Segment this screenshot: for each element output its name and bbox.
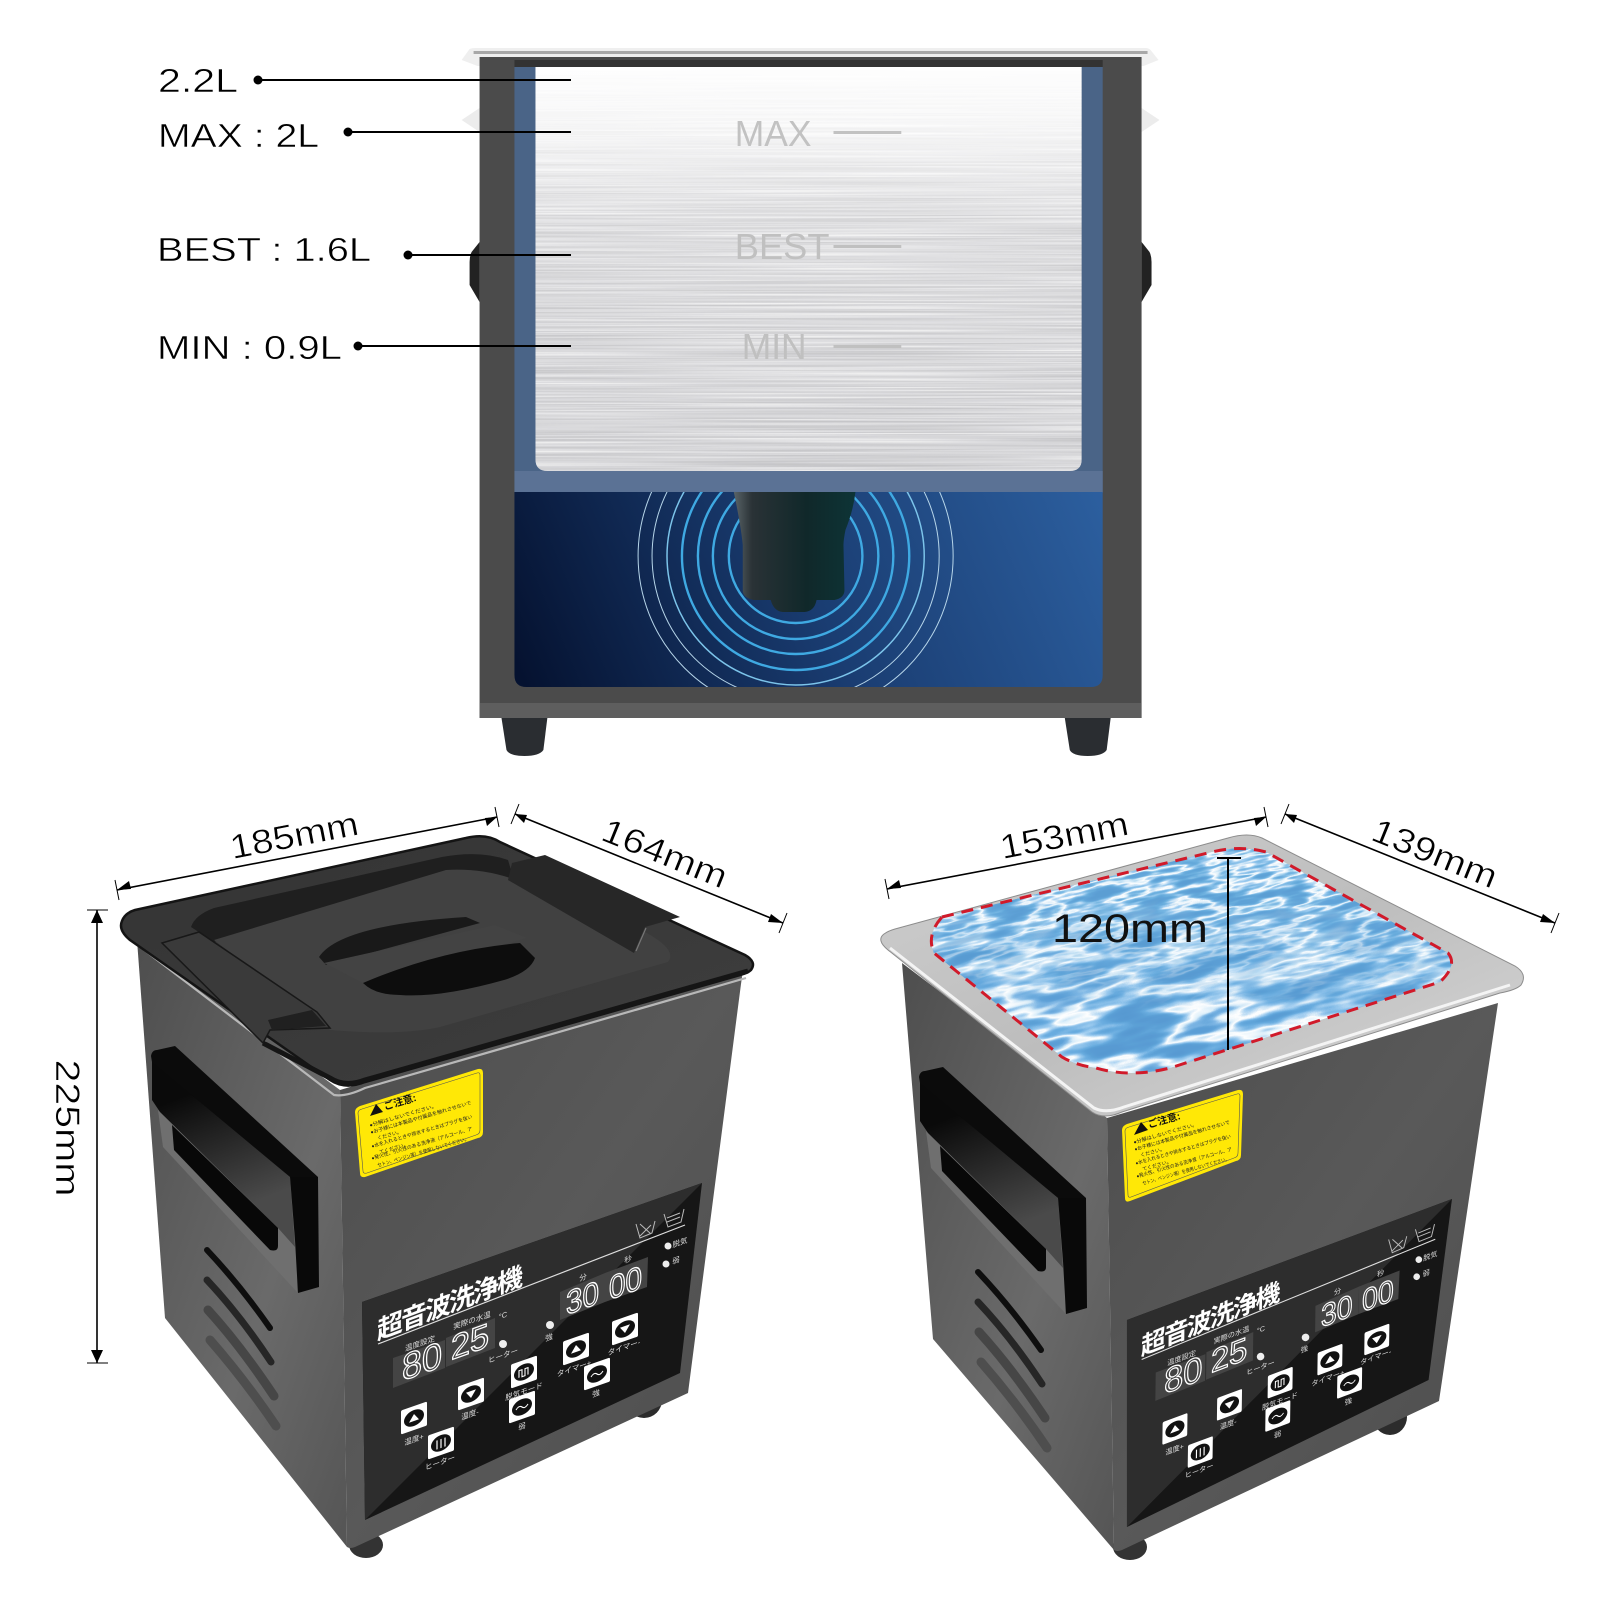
panel upper shade xyxy=(1124,1199,1452,1527)
display 30: 30 xyxy=(1321,1288,1353,1334)
scale mark MIN xyxy=(742,326,901,367)
steel inner tank xyxy=(535,67,1082,471)
ventilation slats xyxy=(207,1250,276,1426)
button down temp xyxy=(458,1377,484,1411)
label plate xyxy=(1122,1090,1243,1202)
left side face xyxy=(137,940,347,1547)
panel small labels: 分 xyxy=(1334,1286,1342,1297)
panel rule xyxy=(1142,1239,1435,1359)
panel small labels: 脱気モード xyxy=(1262,1390,1298,1412)
side tab right xyxy=(1142,108,1160,132)
side tab left xyxy=(462,108,480,132)
label text: セトン、ベンジン等）を使用しないでください。 xyxy=(1142,1155,1230,1187)
warning label xyxy=(355,1069,483,1177)
left tab xyxy=(162,932,330,1043)
button timer down xyxy=(612,1312,638,1346)
panel small labels: 脱気 xyxy=(1423,1249,1438,1263)
tank body xyxy=(480,57,1142,718)
scale mark MAX xyxy=(735,113,901,154)
panel small labels: タイマー- xyxy=(1360,1347,1392,1367)
product: open unit with water xyxy=(880,834,1524,1560)
display 00: 00 xyxy=(1362,1272,1394,1319)
panel diagonal xyxy=(1124,1199,1452,1527)
recess dark wall xyxy=(191,854,514,942)
scale mark MIN: MIN xyxy=(742,326,807,367)
foot right xyxy=(1065,718,1111,756)
panel small labels: ヒーター xyxy=(1185,1461,1213,1480)
panel small labels: 温度+ xyxy=(1165,1442,1184,1457)
callout 2.2L xyxy=(158,62,571,99)
depth label: 120mm xyxy=(1052,907,1208,951)
control panel xyxy=(1124,1199,1452,1527)
rim top line xyxy=(474,51,1148,54)
side handle left xyxy=(470,242,480,302)
callout MAX 2L xyxy=(158,117,571,154)
panel upper shade xyxy=(362,1183,702,1520)
base band xyxy=(480,703,1142,718)
rim highlight xyxy=(890,948,1510,1111)
scale mark MAX: MAX xyxy=(735,113,812,154)
display 25: 25 xyxy=(451,1316,489,1368)
dimension: 153mm: 153mm xyxy=(997,805,1132,867)
lid carry bar xyxy=(324,925,527,983)
button timer up xyxy=(563,1332,589,1366)
warning triangle xyxy=(370,1104,383,1116)
water surface xyxy=(932,848,1452,1073)
dimension: 185mm: 185mm xyxy=(227,805,362,867)
button weak xyxy=(509,1390,535,1424)
callout MIN 0.9L: MIN : 0.9L xyxy=(157,329,342,366)
panel small labels: 実際の水温 xyxy=(453,1309,491,1332)
label text: セトン、ベンジン等）を使用しないでください。 xyxy=(377,1135,470,1169)
dimension: 164mm: 164mm xyxy=(596,812,733,896)
panel small labels: 温度設定 xyxy=(1167,1348,1197,1368)
label text: てください。 xyxy=(1142,1158,1172,1173)
panel small labels: 強 xyxy=(592,1387,600,1399)
dimension: 139mm: 139mm xyxy=(1366,812,1503,896)
ventilation slats xyxy=(978,1272,1047,1448)
lid recess floor xyxy=(214,870,670,1032)
callout MIN 0.9L xyxy=(157,329,571,366)
panel small labels: 強 xyxy=(545,1331,553,1343)
left side face xyxy=(902,963,1114,1550)
handle lower plate xyxy=(926,1131,1065,1313)
display 25: 25 xyxy=(1211,1331,1248,1381)
panel small labels: 弱 xyxy=(518,1421,526,1432)
lower band xyxy=(514,471,1103,493)
label text: ●発火性、引火性のある洗浄液（アルコール、ア xyxy=(371,1125,473,1162)
dark top edge xyxy=(514,60,1103,67)
panel small labels: ヒーター xyxy=(425,1453,455,1472)
display 30: 30 xyxy=(566,1274,599,1323)
callout BEST 1.6L xyxy=(157,231,571,268)
handle grip xyxy=(152,1057,295,1247)
foot front xyxy=(349,1532,383,1558)
handle slot xyxy=(940,1146,1046,1272)
panel small labels: 分 xyxy=(579,1272,587,1283)
foot right xyxy=(626,1382,662,1418)
front face xyxy=(340,970,743,1548)
button strong xyxy=(1337,1367,1362,1399)
right tab xyxy=(508,855,680,953)
label text: ●お子様には本製品や付属品を触れさせないで xyxy=(370,1099,472,1136)
handle grip xyxy=(920,1078,1063,1268)
panel small labels: 温度+ xyxy=(404,1431,424,1447)
panel small labels: 温度- xyxy=(461,1406,479,1422)
panel small labels xyxy=(404,1235,688,1472)
foot right xyxy=(1373,1399,1407,1435)
foot left xyxy=(501,718,547,756)
panel small labels: 弱 xyxy=(1274,1429,1281,1440)
scale mark BEST: BEST xyxy=(735,226,830,267)
button heater xyxy=(428,1426,454,1460)
wash icons xyxy=(636,1209,684,1238)
handle assembly xyxy=(151,1046,319,1293)
control panel xyxy=(362,1183,702,1520)
display 00: 00 xyxy=(609,1259,642,1308)
panel title: 超音波洗浄機 xyxy=(1141,1277,1281,1361)
button up temp xyxy=(1162,1413,1188,1445)
callout MAX 2L: MAX : 2L xyxy=(158,117,319,154)
label text: てください。 xyxy=(379,1141,409,1156)
warning label xyxy=(1122,1090,1243,1202)
label text xyxy=(369,1099,473,1169)
wash icons xyxy=(1388,1224,1435,1253)
button timer down xyxy=(1364,1323,1389,1355)
dimension: 139mm xyxy=(1281,804,1559,933)
panel small labels: 温度- xyxy=(1220,1417,1237,1432)
left tab ledge xyxy=(268,1010,326,1030)
scale mark BEST xyxy=(735,226,901,267)
panel small labels: タイマー- xyxy=(608,1337,641,1358)
foot front xyxy=(1113,1534,1147,1560)
panel small labels: 強 xyxy=(1301,1343,1309,1355)
lid hole back xyxy=(319,917,480,965)
panel diagonal xyxy=(362,1183,702,1520)
dimension: 185mm xyxy=(115,805,499,900)
ultrasonic wave rings xyxy=(638,492,954,687)
handle end xyxy=(1058,1198,1087,1314)
button down temp xyxy=(1217,1389,1242,1421)
front face xyxy=(1107,1003,1498,1551)
callout 2.2L: 2.2L xyxy=(158,62,238,99)
indicator lights xyxy=(1257,1256,1422,1360)
display 80: 80 xyxy=(402,1334,442,1390)
handle lower plate xyxy=(158,1110,297,1292)
label text: ●お子様には本製品や付属品を触れさせないで xyxy=(1134,1119,1231,1153)
panel small labels xyxy=(1165,1249,1438,1481)
product: unit with lid xyxy=(121,836,753,1558)
label text: ●水を入れるときや排水するときはプラグを抜い xyxy=(371,1113,473,1150)
transducer probe xyxy=(734,492,855,612)
label text: ●発火性、引火性のある洗浄液（アルコール、ア xyxy=(1136,1146,1233,1180)
right tab highlight xyxy=(636,928,646,951)
rim of tank xyxy=(462,48,1159,66)
panel small labels: 弱 xyxy=(1423,1267,1430,1279)
label text xyxy=(1133,1119,1233,1187)
label text: ●分解はしないでください。 xyxy=(1133,1121,1198,1146)
lid hole front xyxy=(363,943,535,995)
button degas mode xyxy=(511,1355,537,1389)
panel small labels: °C xyxy=(1257,1323,1266,1335)
warning triangle xyxy=(1134,1122,1148,1135)
panel title: 超音波洗浄機 xyxy=(377,1261,523,1346)
button heater xyxy=(1188,1436,1213,1468)
panel small labels: °C xyxy=(499,1310,508,1321)
button strong xyxy=(584,1357,610,1391)
panel rule xyxy=(378,1225,685,1344)
panel small labels: ヒーター xyxy=(488,1346,518,1365)
upper blue cavity xyxy=(514,67,1103,492)
lid xyxy=(121,836,753,1095)
side handle right xyxy=(1142,242,1152,302)
label text: ●水を入れるときや排水するときはプラグを抜い xyxy=(1135,1133,1232,1167)
button weak xyxy=(1265,1400,1290,1432)
dimension: 164mm xyxy=(511,804,787,933)
stainless rim xyxy=(881,835,1523,1116)
depth line xyxy=(1217,858,1241,1050)
lid outer xyxy=(121,836,753,1086)
panel small labels: 脱気モード xyxy=(505,1380,543,1403)
handle top edge xyxy=(151,1046,318,1177)
label heading: ご注意: xyxy=(382,1091,418,1113)
panel small labels: 脱気 xyxy=(672,1235,688,1250)
label plate xyxy=(355,1069,483,1177)
lid front lip xyxy=(263,971,748,1084)
product: front cutaway view of tank xyxy=(462,48,1160,756)
label text: ください。 xyxy=(1140,1145,1166,1159)
callout BEST 1.6L: BEST : 1.6L xyxy=(157,231,371,268)
button up temp xyxy=(401,1401,427,1435)
indicator lights xyxy=(499,1242,672,1348)
lower blue chamber xyxy=(514,492,1103,687)
display 80: 80 xyxy=(1164,1348,1203,1402)
dimension: 225mm: 225mm xyxy=(48,1060,86,1196)
panel small labels: ヒーター xyxy=(1246,1358,1275,1377)
panel small labels: 秒 xyxy=(1377,1267,1385,1279)
handle end xyxy=(290,1177,319,1293)
button degas mode xyxy=(1268,1367,1293,1399)
dimension: 153mm xyxy=(885,805,1268,899)
panel small labels: 実際の水温 xyxy=(1213,1324,1250,1346)
label heading: ご注意: xyxy=(1146,1109,1182,1131)
button timer up xyxy=(1317,1344,1343,1376)
panel small labels: 強 xyxy=(1345,1395,1353,1407)
label text: ください。 xyxy=(377,1128,403,1142)
label text: ●分解はしないでください。 xyxy=(369,1102,438,1129)
panel small labels: 温度設定 xyxy=(405,1333,435,1353)
label inner border xyxy=(358,1073,480,1173)
handle assembly xyxy=(919,1067,1087,1314)
red dashed outline xyxy=(931,848,1452,1073)
dimension: 225mm xyxy=(48,910,108,1363)
lid silver edge xyxy=(135,943,746,1095)
handle top edge xyxy=(919,1067,1086,1198)
panel small labels: 弱 xyxy=(672,1255,680,1266)
panel small labels: タイマー+ xyxy=(557,1358,592,1379)
handle slot xyxy=(172,1125,278,1250)
label inner border xyxy=(1125,1094,1240,1197)
panel small labels: 秒 xyxy=(624,1253,632,1265)
panel small labels: タイマー+ xyxy=(1311,1368,1344,1389)
